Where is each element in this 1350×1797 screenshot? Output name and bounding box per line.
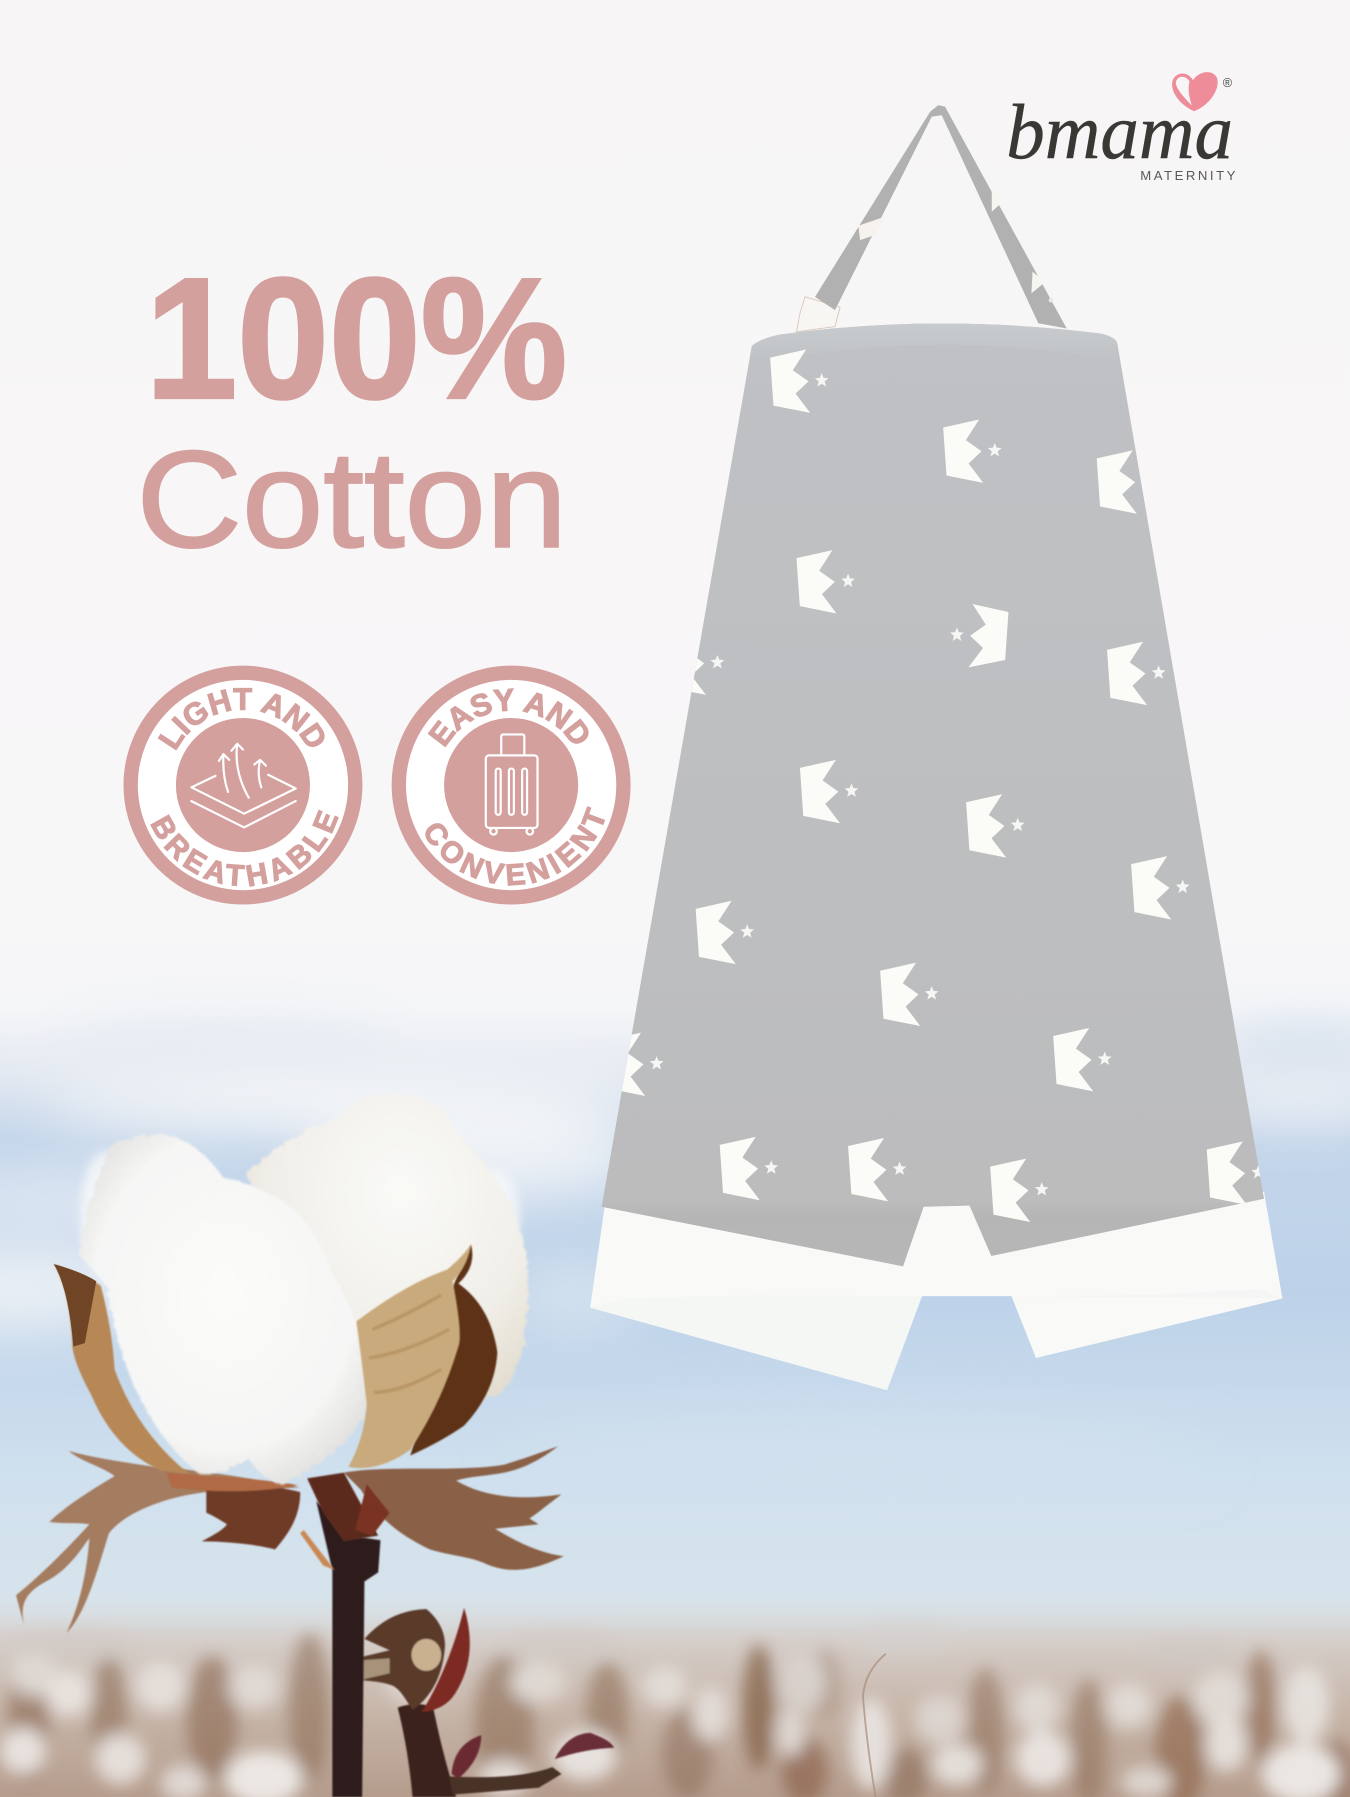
cotton halo — [80, 1152, 520, 1278]
stem — [316, 1501, 380, 1797]
side branch and bud — [339, 1608, 614, 1797]
right pod inside — [410, 1245, 497, 1455]
badge: light and breathable: LIGHT AND — [158, 688, 325, 750]
husk mottling — [369, 1295, 449, 1392]
cover white lining — [590, 1192, 1282, 1390]
cotton fibre: back lobe — [245, 1094, 528, 1421]
badge: light and breathable — [124, 666, 362, 904]
badge: light and breathable: BREATHABLE — [150, 810, 339, 887]
logo: bmama maternity: bmama — [1006, 89, 1233, 175]
icon: suitcase — [486, 734, 538, 835]
heading: Cotton: Cotton — [136, 424, 567, 577]
left pod — [54, 1264, 189, 1474]
badge: easy and convenient: CONVENIENT — [425, 806, 606, 886]
icon: heart — [1172, 72, 1218, 111]
cover body — [602, 323, 1264, 1266]
cover top hem — [752, 323, 1117, 364]
left calyx leaves — [16, 1451, 300, 1633]
left pod dark tip — [54, 1264, 96, 1347]
cotton field background — [0, 1593, 1350, 1797]
cotton fibre: front lobe — [79, 1135, 371, 1485]
crown pattern — [605, 350, 1265, 1222]
right pod husk — [348, 1245, 471, 1468]
right calyx leaves — [300, 1446, 564, 1570]
badge: easy and convenient: EASY AND — [428, 688, 589, 748]
badge: easy and convenient — [392, 666, 631, 904]
product: nursing cover — [590, 105, 1282, 1390]
clouds — [0, 1026, 1350, 1484]
heading: 100%: 100% — [146, 243, 567, 435]
logo: bmama maternity: MATERNITY — [1140, 168, 1236, 183]
cotton boll plant — [16, 1094, 614, 1797]
logo: bmama maternity: ® — [1223, 76, 1233, 90]
icon: breathable fabric layers — [191, 744, 296, 827]
cover strap — [796, 105, 1067, 332]
